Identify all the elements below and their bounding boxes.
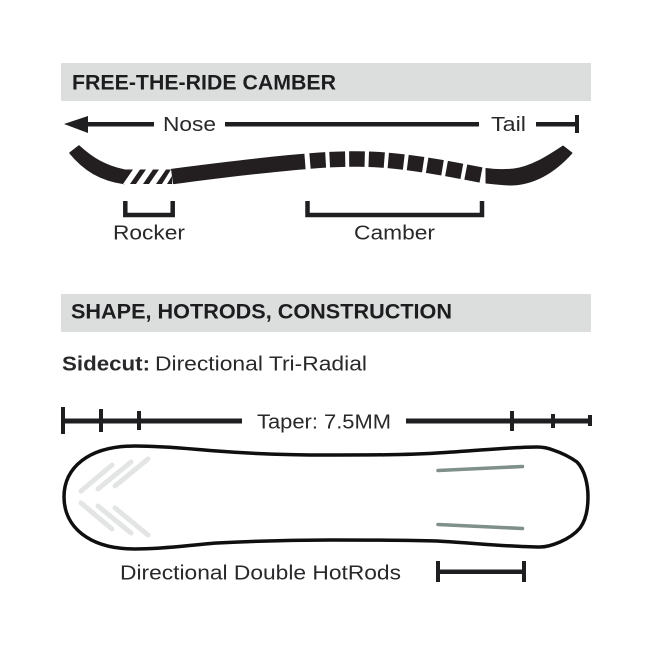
text: sidecut: Sidecut: xyxy=(62,352,150,376)
rocker section hatched xyxy=(123,170,172,184)
heading bar: camber xyxy=(61,63,591,101)
panel: shape, hotrods, construction xyxy=(61,294,592,584)
label: camber: Camber xyxy=(354,222,435,244)
heading bar: shape xyxy=(61,294,591,332)
label: taper: Taper: 7.5MM xyxy=(257,410,391,434)
arrow: nose direction xyxy=(64,116,154,133)
board outline xyxy=(64,446,588,549)
text: sidecut: Directional Tri-Radial xyxy=(155,352,367,376)
label: directional double hotrods: Directional Double HotRods xyxy=(120,562,401,584)
chart: board camber profile xyxy=(70,146,572,185)
label: tail: Tail xyxy=(491,113,526,136)
scale: taper right xyxy=(406,411,592,431)
camber section dashed xyxy=(310,159,481,175)
nose inserts xyxy=(81,459,148,535)
bracket: rocker xyxy=(125,201,173,215)
nose section xyxy=(70,146,124,184)
line: tail end marker xyxy=(536,115,579,133)
tail section xyxy=(486,146,572,185)
bracket: hotrods length xyxy=(436,561,526,582)
label: rocker: Rocker xyxy=(113,222,185,244)
panel: free-the-ride camber xyxy=(61,63,591,244)
line: nose to tail xyxy=(225,122,479,126)
heading: camber: FREE-THE-RIDE CAMBER xyxy=(72,72,336,94)
text: sidecut xyxy=(62,352,367,376)
heading: shape: SHAPE, HOTRODS, CONSTRUCTION xyxy=(71,300,452,324)
hotrods xyxy=(438,466,522,528)
bracket: camber xyxy=(308,201,482,215)
label: nose: Nose xyxy=(163,113,216,136)
flat section xyxy=(172,162,305,176)
scale: taper left xyxy=(61,407,242,434)
